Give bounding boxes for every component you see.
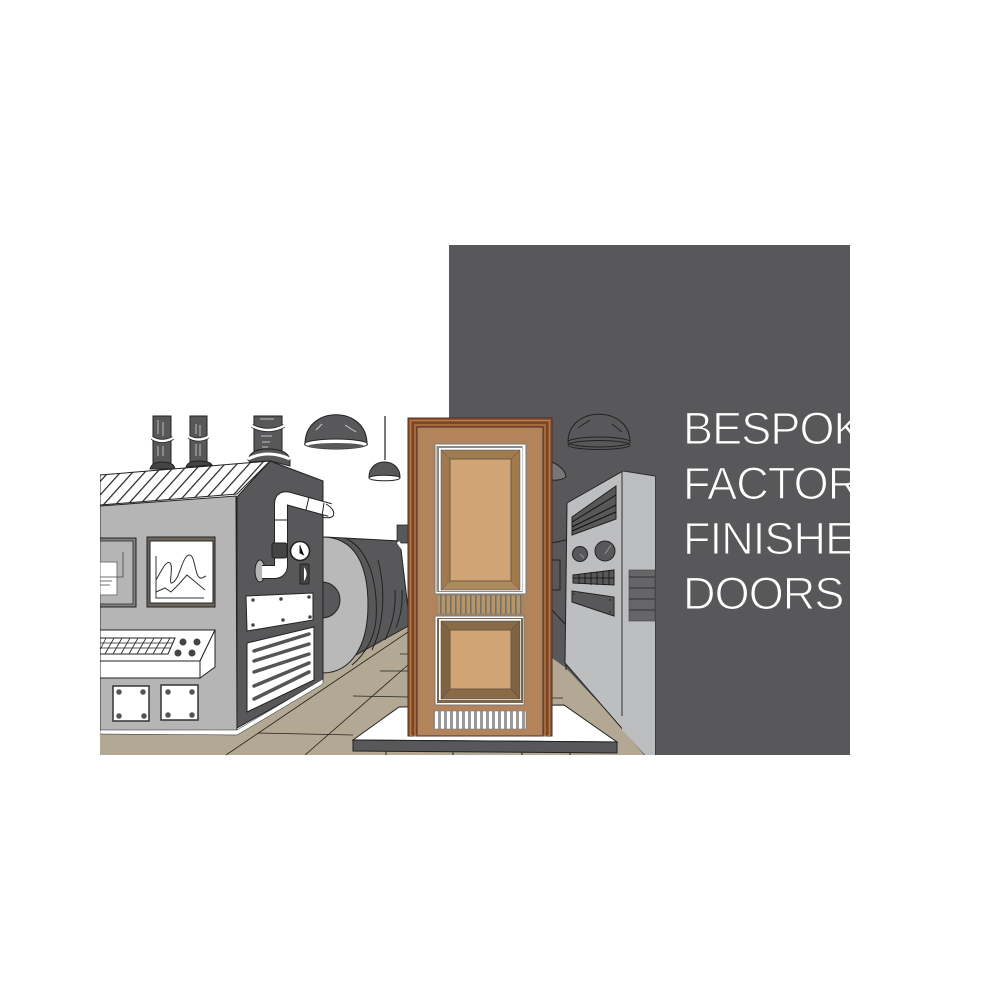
lamp three bbox=[568, 414, 630, 450]
cabinet gauges bbox=[572, 541, 615, 562]
factory illustration bbox=[100, 414, 655, 755]
chimneys bbox=[150, 416, 290, 469]
lamp two bbox=[369, 416, 400, 481]
title text bbox=[683, 403, 892, 619]
dark background panel bbox=[449, 245, 850, 755]
coil roll bbox=[324, 524, 408, 674]
floor bbox=[100, 625, 648, 755]
small switch bbox=[300, 564, 309, 584]
monitor left bbox=[100, 538, 136, 607]
monitor with line chart bbox=[147, 537, 215, 607]
pressure gauge bbox=[289, 542, 310, 560]
cabinet top vent bbox=[572, 486, 616, 535]
machine side face bbox=[237, 461, 323, 728]
title text: DOORS bbox=[683, 568, 844, 619]
machine front face bbox=[100, 496, 237, 731]
background machine right bbox=[552, 540, 566, 670]
machine roof bbox=[100, 461, 270, 505]
machine base strip bbox=[100, 679, 323, 735]
side plate bbox=[246, 593, 313, 631]
bottom vent strip bbox=[434, 711, 526, 729]
bolted plates bbox=[113, 685, 198, 721]
door bbox=[408, 418, 552, 736]
cabinet side vent bbox=[629, 570, 655, 621]
keyboard console bbox=[100, 630, 215, 678]
door leaf bbox=[417, 427, 543, 736]
platform bbox=[353, 705, 617, 755]
door frame bbox=[408, 418, 552, 736]
side vent grille bbox=[247, 627, 314, 712]
title text: FACTORY bbox=[683, 458, 888, 509]
title text: BESPOKE bbox=[683, 403, 892, 454]
cabinet plate bbox=[572, 591, 614, 616]
left machine bbox=[100, 461, 334, 735]
middle ribbed bar bbox=[437, 595, 523, 614]
lower panel bbox=[435, 616, 524, 705]
upper panel bbox=[435, 444, 526, 594]
title text: FINISHED bbox=[683, 513, 886, 564]
cabinet meter bar bbox=[573, 570, 614, 585]
valve bbox=[272, 543, 287, 558]
pipe bbox=[255, 497, 334, 582]
lamp one bbox=[304, 415, 368, 449]
lamp four bbox=[552, 462, 566, 480]
infographic scene bbox=[100, 245, 850, 755]
right cabinet bbox=[565, 471, 655, 755]
hanging lamps bbox=[304, 414, 630, 481]
